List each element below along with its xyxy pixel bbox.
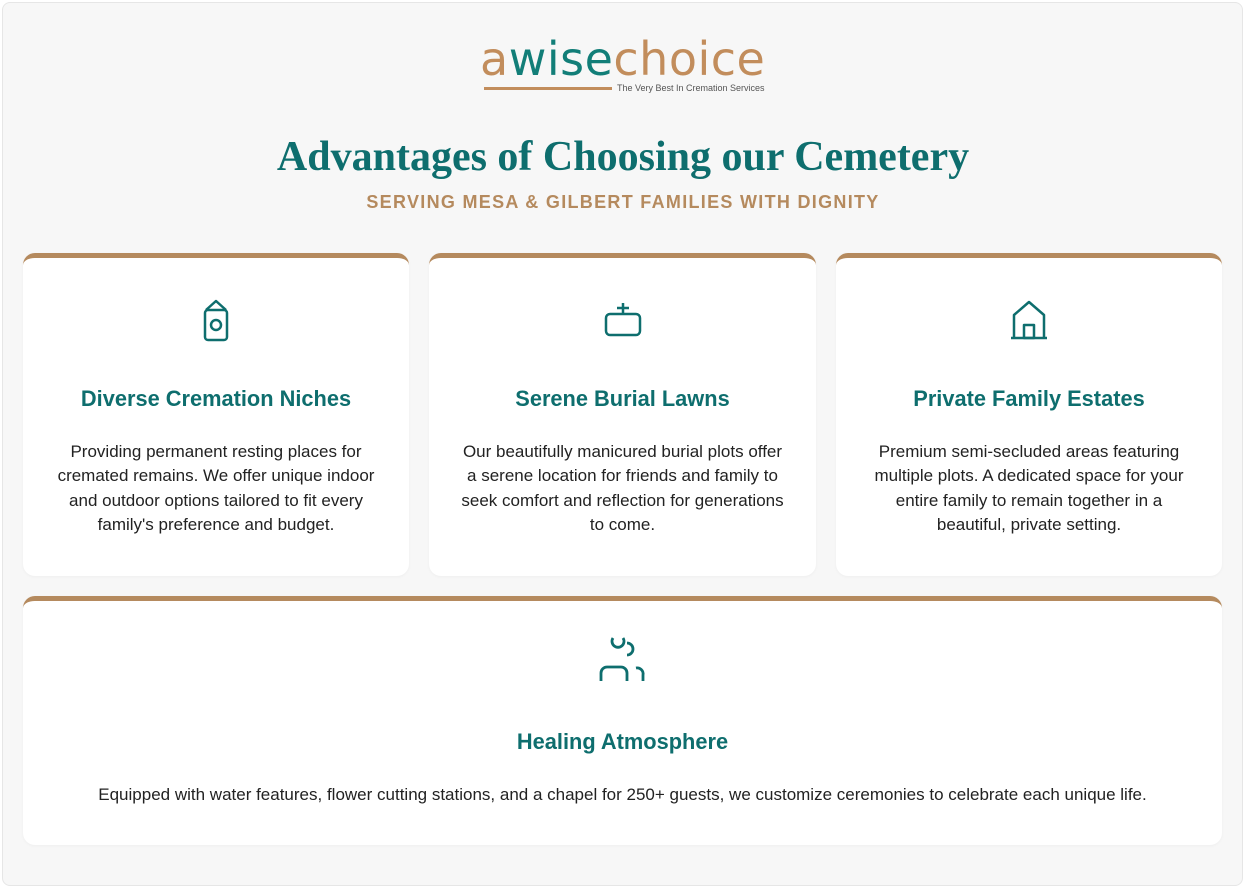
- panel: burial lawns: [429, 253, 816, 576]
- panel: family estates: [836, 253, 1222, 576]
- panel: healing atmosphere: [23, 596, 1222, 845]
- text: Equipped with water features, flower cutting stations, and a chapel for 250+ guests, we customize ceremonies to celebrate each unique life.: [98, 785, 1147, 804]
- icon: house: [1011, 300, 1047, 340]
- icon: niche: [204, 300, 228, 342]
- logo: awisechoice: [480, 32, 765, 86]
- logo: The Very Best In Cremation Services: [617, 83, 765, 93]
- title: Advantages of Choosing our Cemetery: [277, 134, 969, 180]
- subtitle: SERVING MESA & GILBERT FAMILIES WITH DIGNITY: [366, 192, 880, 212]
- heading: Serene Burial Lawns: [515, 386, 730, 411]
- text: Our beautifully manicured burial plots offer a serene location for friends and family to seek comfort and reflection for generations to come.: [461, 442, 784, 534]
- icon: burial: [604, 303, 642, 336]
- text: Providing permanent resting places for cremated remains. We offer unique indoor and outdoor options tailored to fit every family's preference and budget.: [58, 442, 374, 534]
- text: Premium semi-secluded areas featuring multiple plots. A dedicated space for your entire family to remain together in a beautiful, private setting.: [874, 442, 1184, 534]
- heading: Diverse Cremation Niches: [81, 386, 351, 411]
- panel: cremation niches: [23, 253, 409, 576]
- heading: Healing Atmosphere: [517, 729, 728, 754]
- icon: people: [600, 637, 644, 681]
- heading: Private Family Estates: [913, 386, 1145, 411]
